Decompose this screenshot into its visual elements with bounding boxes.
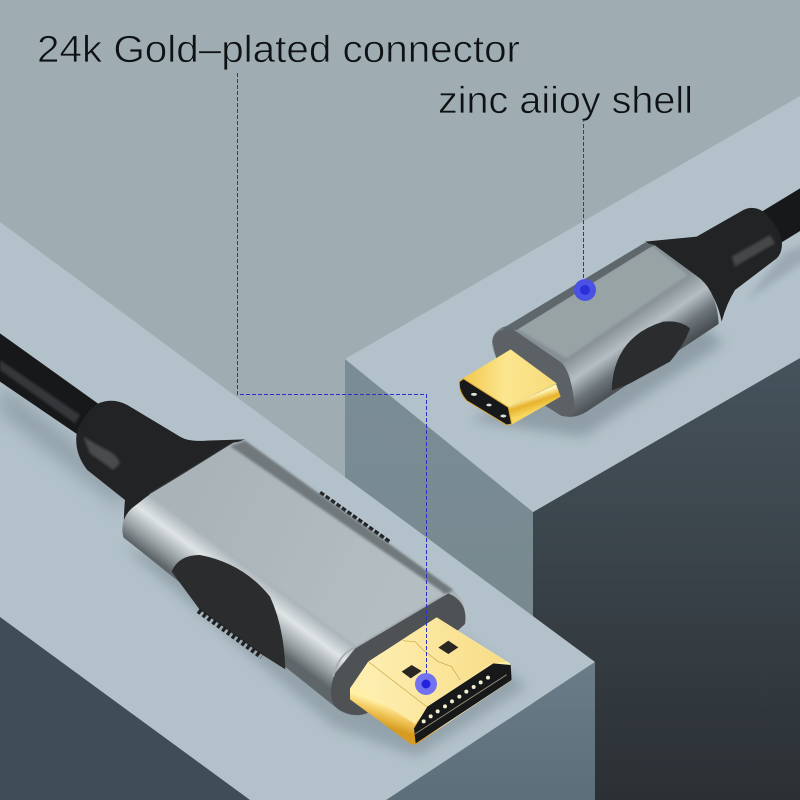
shadow: USB-C <box>470 320 723 437</box>
shadow: USB-C relief <box>747 243 800 300</box>
plug side: USB-C <box>508 384 561 425</box>
plug seam <box>368 662 427 707</box>
strain relief: USB-C <box>645 208 782 322</box>
square hole right <box>438 641 458 654</box>
shell front face <box>331 593 465 715</box>
leader line: zinc shell <box>582 118 584 280</box>
USB-C connector <box>470 243 723 437</box>
cable: USB-C <box>762 187 800 243</box>
body: HDMI shell <box>122 441 465 715</box>
marker: gold connector <box>415 673 437 695</box>
shell top surface <box>150 446 445 647</box>
contacts: HDMI <box>422 676 490 723</box>
relief highlight <box>732 235 775 267</box>
shell top surface <box>517 246 688 358</box>
body: USB-C shell <box>492 243 719 417</box>
tongue line <box>415 675 507 734</box>
HDMI connector <box>122 441 527 757</box>
leader line: gold connector <box>238 73 426 683</box>
shell top edge <box>230 441 453 595</box>
plug top seam <box>403 641 460 680</box>
relief highlight <box>83 437 120 470</box>
cable highlight <box>0 360 80 423</box>
plug top: USB-C <box>463 349 557 407</box>
shell top edge <box>500 243 655 330</box>
panel: lower block front face <box>386 662 595 800</box>
plug base <box>350 617 512 745</box>
panel: left block dark corner <box>0 617 250 800</box>
USB-C plug <box>459 349 561 425</box>
top grip bumps <box>320 493 391 543</box>
panel: right block left face <box>345 359 533 640</box>
panel: right block top surface <box>345 96 800 512</box>
label: zinc shell: zinc aiioy shell <box>438 80 693 122</box>
strain relief: HDMI <box>76 401 245 538</box>
shadow: HDMI <box>123 547 527 757</box>
plug opening: USB-C <box>459 379 512 425</box>
label: gold connector: 24k Gold–plated connector <box>37 29 520 71</box>
HDMI plug <box>350 617 512 745</box>
plug opening: HDMI <box>414 663 512 743</box>
grip bumps: USB-C <box>625 358 670 383</box>
square hole left <box>402 665 422 678</box>
panel: left block top surface <box>0 222 595 800</box>
shell front rim <box>333 593 447 677</box>
black grip: USB-C <box>612 321 690 391</box>
shadow: HDMI cable <box>0 385 125 510</box>
black grip: HDMI <box>172 555 285 669</box>
marker: zinc shell <box>574 279 596 301</box>
USB-C cable and strain relief <box>645 187 800 322</box>
grip bumps <box>198 611 262 657</box>
panel: right block dark face <box>533 358 800 800</box>
plug top: HDMI <box>353 617 507 724</box>
cable: HDMI <box>0 331 100 435</box>
shell front face <box>492 328 575 416</box>
HDMI cable and strain relief <box>0 331 245 538</box>
contacts: USB-C <box>471 393 506 417</box>
